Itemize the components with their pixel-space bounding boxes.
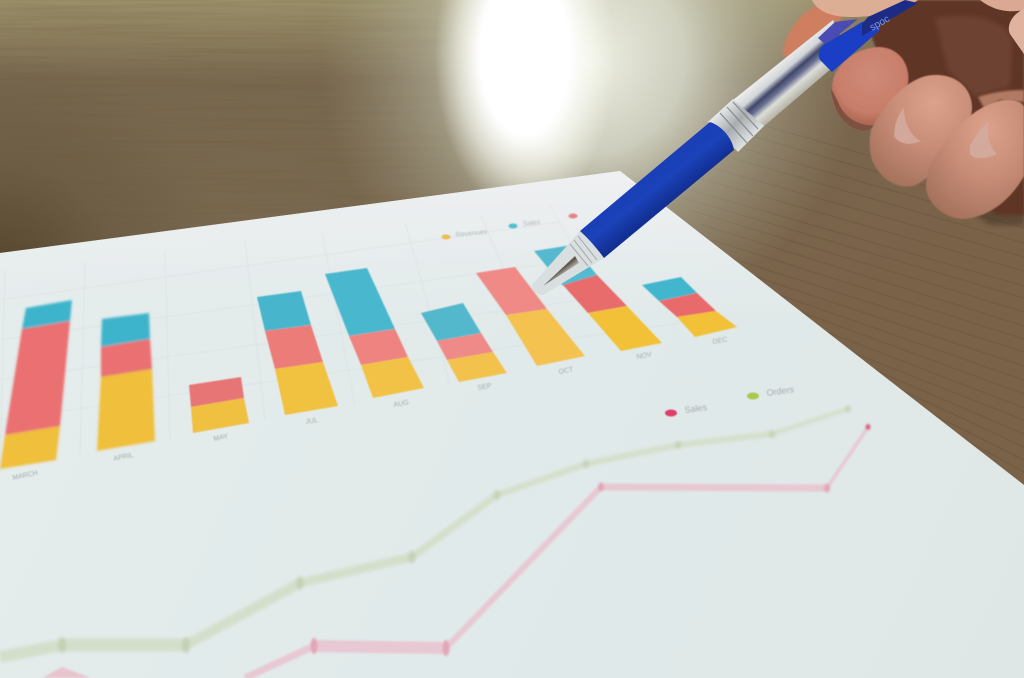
month axis labels: OCT	[558, 366, 575, 376]
clear nose cone	[532, 231, 604, 295]
finger: middle	[870, 75, 972, 187]
shadow of the hand on the table	[960, 190, 1024, 225]
blue clip	[819, 18, 880, 72]
finger: index	[832, 47, 908, 127]
bar 8	[534, 245, 662, 351]
blue rubber grip	[580, 122, 734, 258]
thumbnail: middle finger	[894, 108, 921, 144]
finger: top pale fingertip	[812, 0, 918, 17]
bar chart legend: Revenues	[455, 229, 488, 239]
blue ink inside barrel	[818, 19, 858, 45]
silver ring section	[708, 99, 764, 152]
month axis labels: DEC	[712, 337, 728, 346]
finger: ring	[926, 100, 1024, 219]
back finger	[783, 7, 850, 64]
light glare halo on the table	[320, 0, 860, 340]
hand holding the pen	[783, 0, 1024, 225]
line chart legend	[665, 384, 795, 416]
month axis labels: APRIL	[113, 452, 134, 463]
bar 2	[97, 313, 155, 451]
bar 7	[476, 267, 585, 366]
month axis labels	[12, 337, 728, 482]
bar chart legend: Sales	[522, 219, 541, 228]
thumbnail: ring finger	[970, 122, 997, 158]
bar 3	[189, 377, 249, 433]
bar 6	[421, 303, 507, 382]
dark clip top	[862, 0, 918, 36]
stacked bar chart	[0, 245, 737, 469]
bright light reflection	[425, 0, 625, 215]
bar 4	[257, 291, 338, 415]
paper sheet	[0, 171, 1024, 678]
finger: top right fingertip	[980, 0, 1024, 11]
bar chart legend	[442, 214, 578, 240]
month axis labels: MAY	[213, 433, 229, 443]
line chart legend: Orders	[766, 384, 795, 398]
metal tip	[543, 256, 579, 286]
month axis labels: AUG	[393, 399, 409, 409]
line chart: sales (pink)	[42, 424, 870, 678]
month axis labels: NOV	[636, 351, 653, 361]
bar 1	[0, 300, 72, 469]
month axis labels: JUL	[305, 417, 319, 426]
brand text on pen: spoc	[868, 14, 892, 34]
clear barrel	[733, 20, 842, 127]
finger: right edge	[1009, 9, 1024, 54]
wood grain on the right	[640, 90, 1024, 472]
ballpoint pen	[532, 0, 918, 295]
palm shadow	[870, 0, 1024, 215]
bar 9	[642, 277, 737, 337]
bar 5	[325, 268, 424, 398]
month axis labels: SEP	[477, 383, 492, 392]
month axis labels: MARCH	[12, 470, 39, 482]
line chart: orders (green)	[0, 406, 851, 657]
line chart legend: Sales	[684, 402, 708, 415]
faint grid lines	[0, 205, 700, 470]
knuckle patch between fingers	[978, 90, 1024, 108]
